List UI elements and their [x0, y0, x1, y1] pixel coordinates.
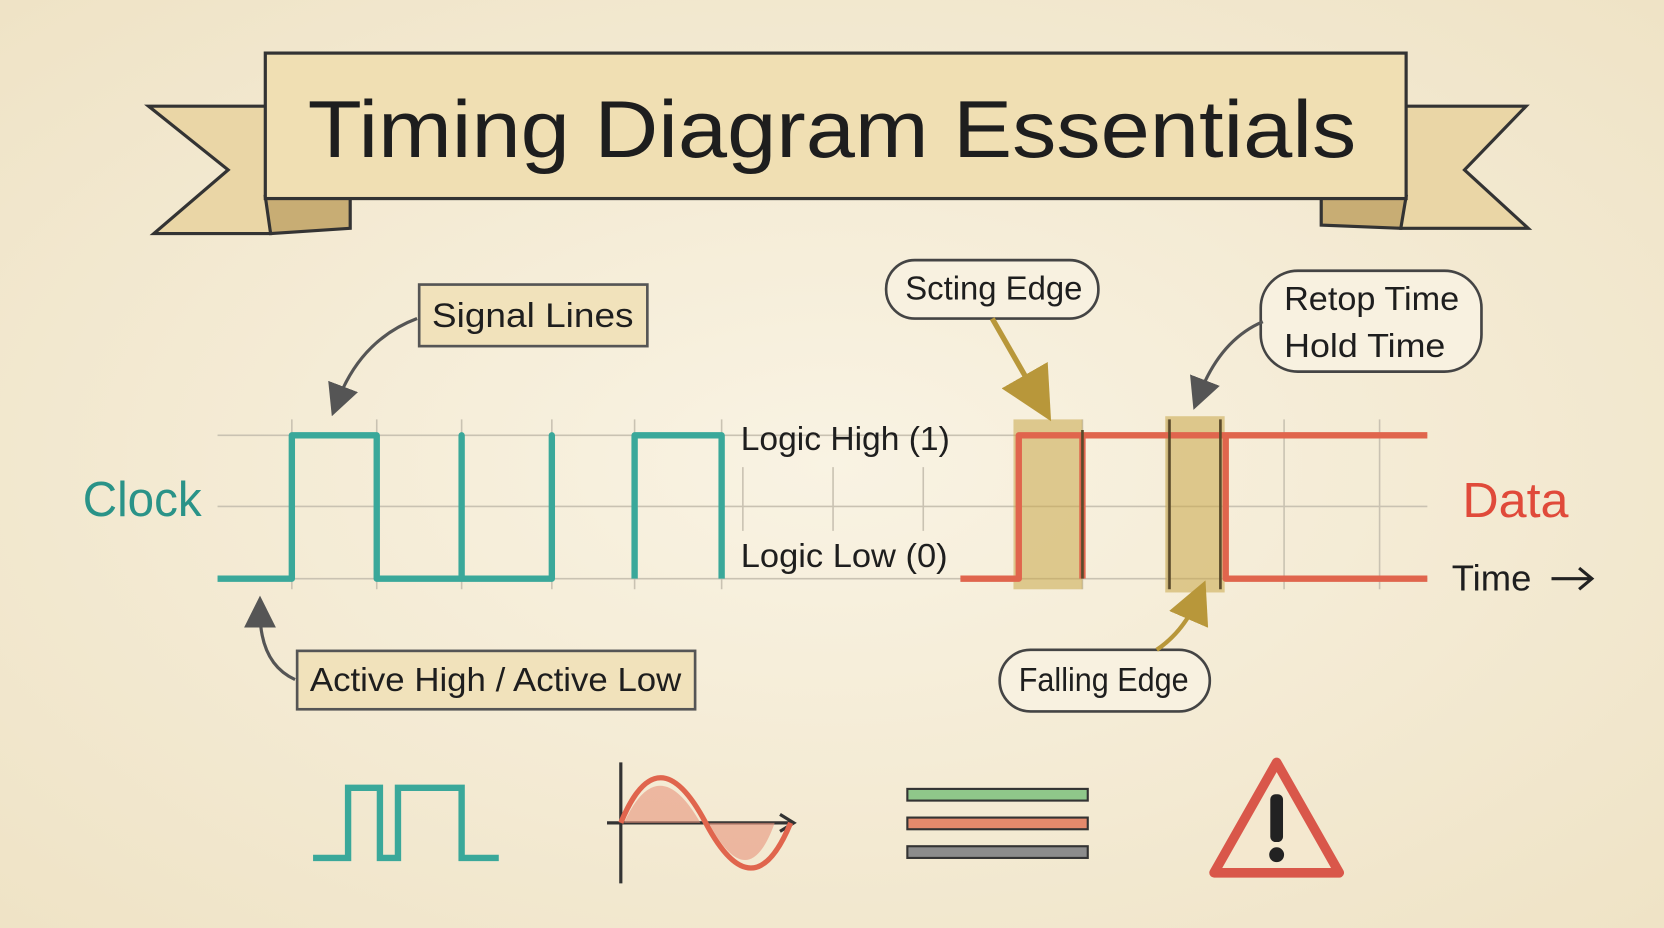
- clock label: Clock: [83, 473, 202, 527]
- data waveform: [960, 435, 1427, 579]
- icon: bus lines: [907, 789, 1088, 858]
- banner right tail: [1401, 106, 1528, 228]
- callout: sctting edge: Scting Edge: [905, 269, 1082, 306]
- logic labels: Logic Low (0): [741, 537, 948, 574]
- icon: warning: [1214, 762, 1339, 873]
- icon: sine wave: [607, 762, 794, 883]
- banner: [149, 53, 1528, 234]
- callout: retop / hold time: [1199, 271, 1481, 395]
- callout: retop / hold time: Hold Time: [1284, 327, 1445, 364]
- time axis label: Time: [1452, 557, 1531, 598]
- icon: square wave: [313, 788, 499, 858]
- callout: retop / hold time: Retop Time: [1284, 280, 1459, 317]
- time axis label: [1452, 557, 1592, 598]
- callout: falling edge: Falling Edge: [1019, 661, 1189, 698]
- clock waveform: [218, 435, 722, 579]
- callout: signal lines: Signal Lines: [432, 297, 634, 335]
- callout: active high / low: [260, 612, 695, 709]
- data label: Data: [1462, 474, 1569, 528]
- logic labels: [741, 420, 950, 574]
- title: Timing Diagram Essentials: [308, 85, 1356, 175]
- banner left tail: [149, 106, 271, 234]
- logic labels: Logic High (1): [741, 420, 950, 457]
- grid: [218, 419, 1427, 589]
- callout: active high / low: Active High / Active Low: [310, 661, 682, 698]
- callout: falling edge: [1000, 600, 1210, 711]
- timing shaded regions: [1013, 416, 1225, 592]
- callout: sctting edge: [886, 260, 1098, 398]
- callout: signal lines: [337, 285, 647, 401]
